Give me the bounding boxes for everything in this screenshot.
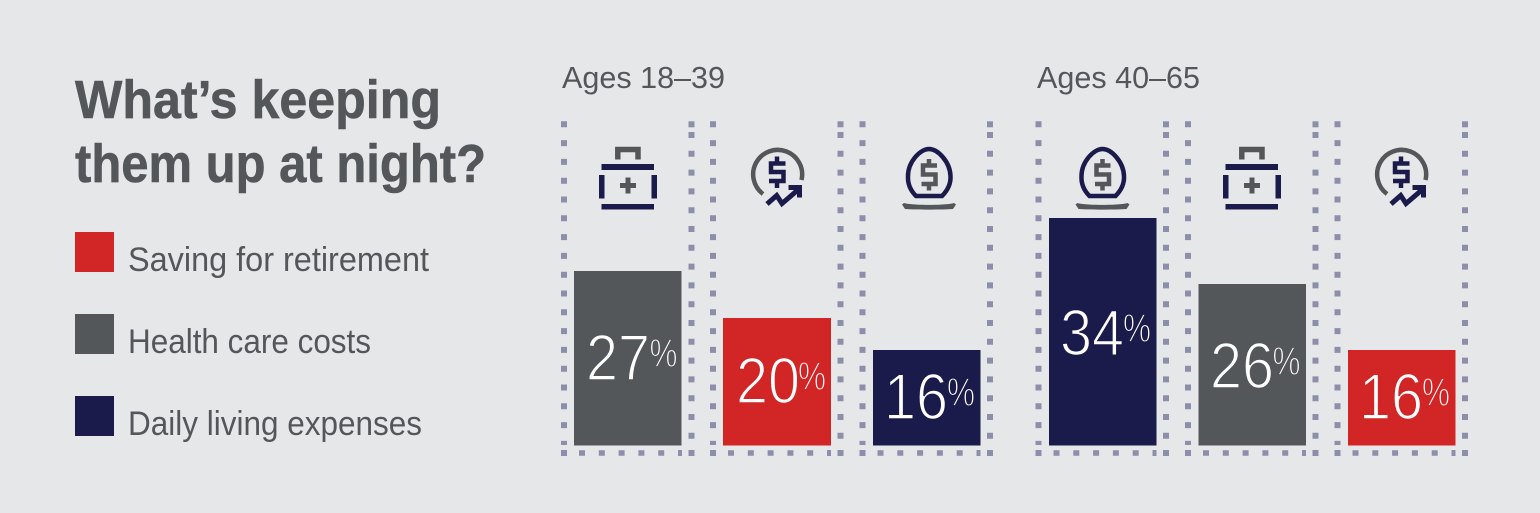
bar: 16%: % <box>1422 371 1450 415</box>
title <box>75 70 486 194</box>
legend item: health care costs <box>75 314 371 361</box>
bar: 26% <box>1198 284 1306 446</box>
bar: 34%: 34 <box>1060 296 1124 369</box>
bar: 16%: % <box>947 371 975 415</box>
heading: ages 40-65: Ages 40–65 <box>1037 60 1200 95</box>
icon: dollar with growth arrow <box>753 150 802 204</box>
legend item: daily living expenses <box>75 396 422 443</box>
title: What’s keeping <box>75 70 441 130</box>
bar: 20%: 20 <box>736 344 800 417</box>
icon: medical kit <box>599 150 657 210</box>
bar: 16% <box>873 350 980 446</box>
bar: 34% <box>1049 218 1156 446</box>
bar: 27% <box>574 271 682 446</box>
bar: 16% <box>1348 350 1456 446</box>
bar: 26%: % <box>1272 340 1300 384</box>
panel: ages 18-39 daily living <box>860 121 993 456</box>
panel: ages 18-39 health care <box>561 121 694 456</box>
legend item: health care costs: Health care costs <box>128 323 371 361</box>
bar: 16%: 16 <box>884 360 948 433</box>
legend item: daily living expenses: Daily living expenses <box>128 405 422 443</box>
icon: dollar with growth arrow <box>1377 150 1426 204</box>
bar: 27%: % <box>650 332 678 376</box>
icon: nest egg <box>902 149 956 210</box>
bar: 34%: % <box>1123 307 1151 351</box>
panel: ages 40-65 daily living <box>1036 121 1169 456</box>
legend item: saving for retirement <box>75 232 430 279</box>
panel: ages 40-65 saving <box>1334 121 1468 456</box>
title: them up at night? <box>75 134 486 194</box>
panel: ages 40-65 health care <box>1185 121 1318 456</box>
bar: 20%: % <box>798 355 826 399</box>
bar: 16%: 16 <box>1359 360 1423 433</box>
bar: 27%: 27 <box>586 321 650 394</box>
heading: ages 18-39: Ages 18–39 <box>562 60 725 95</box>
legend <box>75 232 430 443</box>
bar: 26%: 26 <box>1210 329 1274 402</box>
legend item: saving for retirement: Saving for retirement <box>128 241 430 279</box>
panel: ages 18-39 saving <box>710 121 844 456</box>
icon: nest egg <box>1076 149 1130 210</box>
icon: medical kit <box>1223 150 1281 210</box>
bar: 20% <box>723 318 831 446</box>
